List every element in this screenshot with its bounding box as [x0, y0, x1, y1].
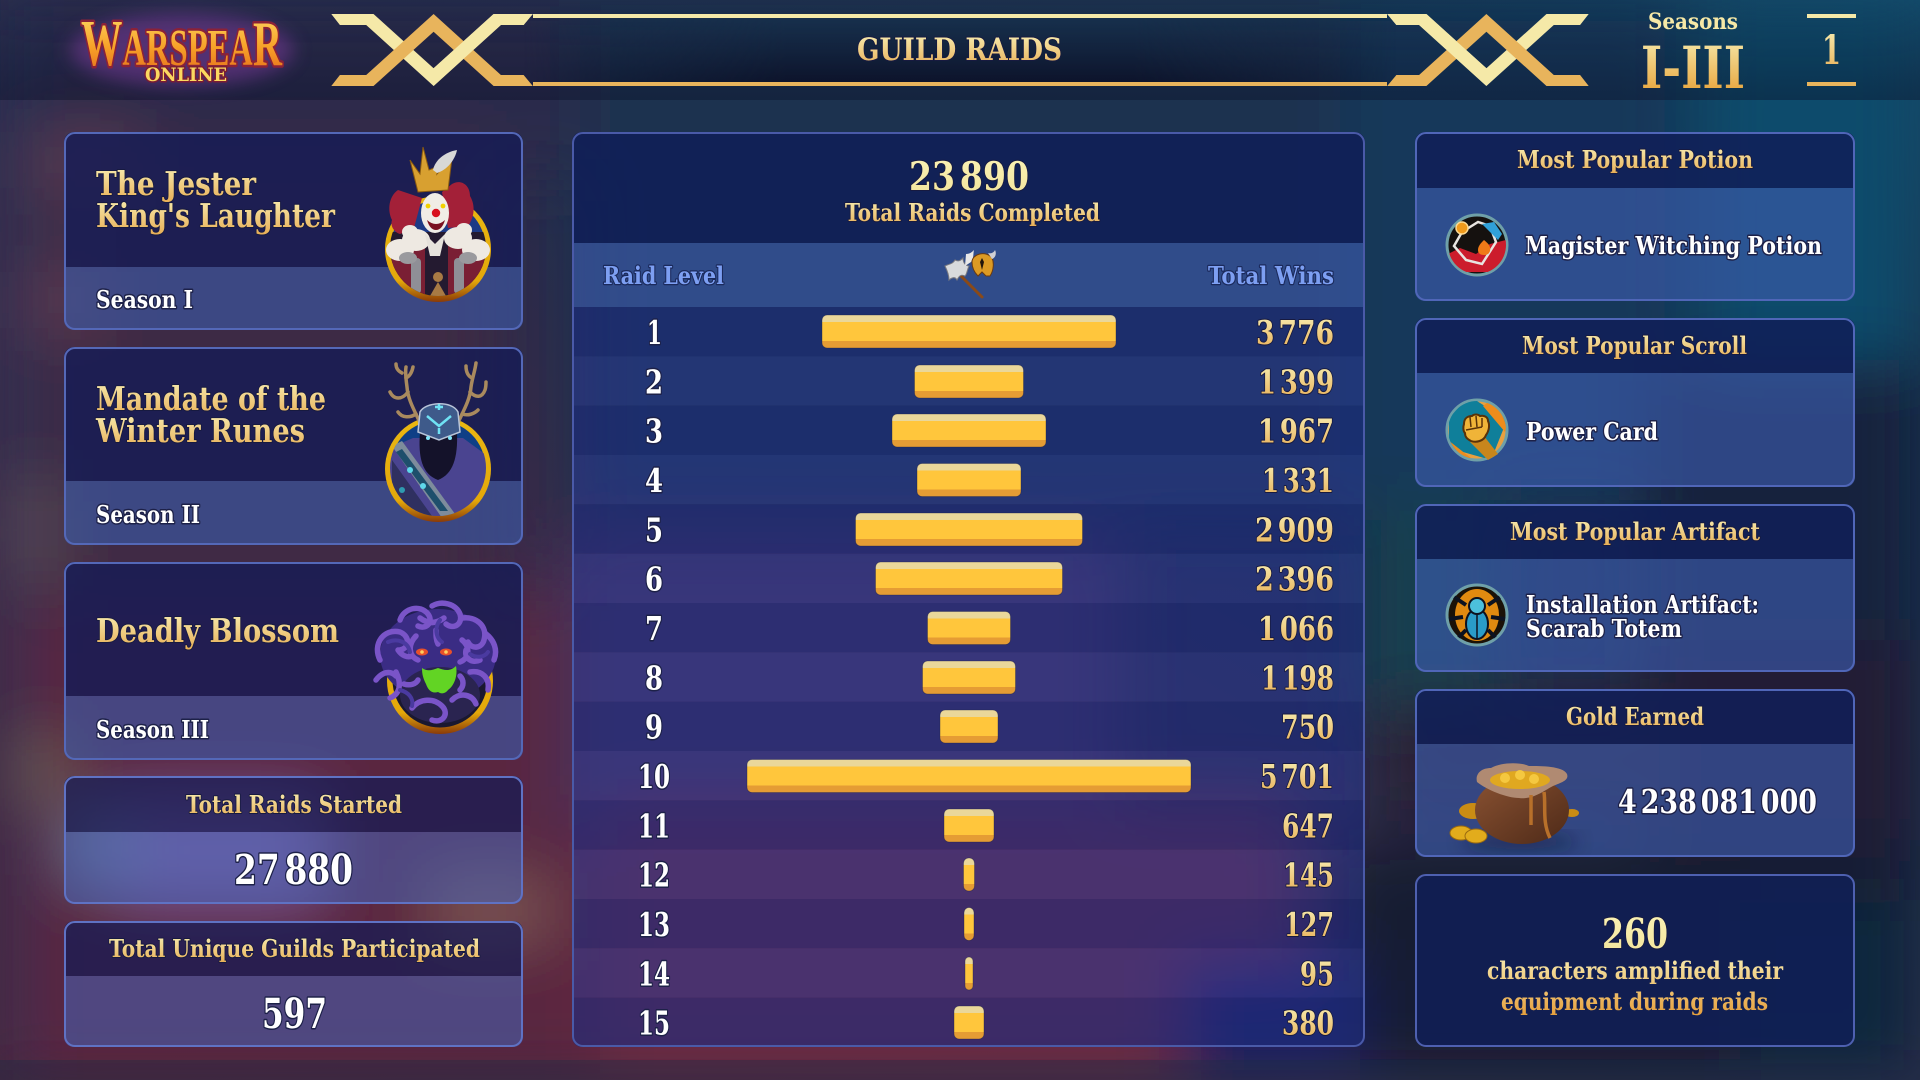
raid level numbers: 5 — [645, 510, 663, 549]
icon: deadly blossom — [376, 603, 496, 734]
panel: total raids started — [64, 776, 523, 904]
total wins values — [1255, 313, 1334, 1043]
title banner — [331, 14, 1589, 86]
value: 597 — [262, 990, 327, 1038]
icon: axe and helmet — [945, 250, 996, 297]
table rows — [572, 307, 1365, 1047]
caption — [1487, 956, 1783, 1016]
raid level numbers: 14 — [638, 954, 670, 993]
label: Most Popular Artifact — [1510, 517, 1760, 546]
heading: guild raids: GUILD RAIDS — [857, 32, 1062, 68]
panel: amplified characters — [1416, 875, 1854, 1046]
raid 1 name: King's Laughter — [96, 196, 335, 235]
label: Most Popular Potion — [1517, 145, 1753, 174]
total wins values: 1 331 — [1262, 461, 1334, 500]
panel: gold earned — [1415, 689, 1855, 857]
raid level numbers: 8 — [645, 658, 663, 697]
raid 2 name: Mandate of the — [96, 379, 326, 418]
total wins values: 1 198 — [1261, 658, 1334, 697]
total raids completed: Total Raids Completed — [845, 198, 1100, 227]
raid level numbers: 7 — [645, 609, 663, 648]
total wins values: 750 — [1281, 708, 1334, 747]
total wins values: 5 701 — [1260, 757, 1334, 796]
total wins values: 1 399 — [1258, 362, 1334, 401]
label: Most Popular Scroll — [1522, 331, 1747, 360]
value: 27 880 — [234, 846, 353, 894]
column head: raid level: Raid Level — [603, 261, 724, 290]
total wins values: 647 — [1282, 806, 1334, 845]
icon: bag of gold — [1450, 763, 1579, 850]
panel: most popular scroll — [1415, 318, 1855, 487]
caption: equipment during raids — [1501, 987, 1768, 1016]
raid level numbers: 13 — [638, 905, 670, 944]
raid 2 name — [95, 379, 326, 450]
icon: winter runes — [385, 363, 493, 522]
panel: raid 3 — [64, 562, 523, 760]
bars — [747, 315, 1191, 1039]
panel: raid 1 — [64, 132, 523, 330]
raid level numbers: 2 — [645, 362, 663, 401]
value: Installation Artifact: — [1526, 590, 1759, 619]
total raids completed: 23 890 — [909, 154, 1029, 200]
logo: Warspear Online: ONLINE — [145, 64, 227, 86]
raid 2 name: Winter Runes — [95, 411, 305, 450]
total wins values: 95 — [1300, 954, 1334, 993]
raid 1 name: The Jester — [96, 164, 257, 203]
raid level numbers: 11 — [638, 806, 670, 845]
label: Gold Earned — [1566, 702, 1704, 731]
value: Power Card — [1526, 417, 1658, 446]
caption: characters amplified their — [1487, 956, 1783, 985]
raid level numbers: 1 — [647, 313, 662, 352]
panel: raid 2 — [64, 347, 523, 545]
label: Total Raids Started — [186, 790, 402, 819]
page number: 1 — [1822, 27, 1841, 74]
total wins values: 145 — [1283, 856, 1334, 895]
column head: total wins: Total Wins — [1208, 261, 1334, 290]
value — [1526, 590, 1759, 643]
value: Magister Witching Potion — [1525, 231, 1822, 260]
value: 4 238 081 000 — [1618, 782, 1817, 821]
total wins values: 2 396 — [1255, 560, 1334, 599]
raid level numbers: 12 — [638, 856, 670, 895]
raid level numbers: 10 — [638, 757, 670, 796]
icon: power card — [1446, 398, 1508, 462]
total wins values: 3 776 — [1256, 313, 1334, 352]
raid level numbers: 3 — [645, 412, 663, 451]
total wins values: 1 066 — [1258, 609, 1334, 648]
header band — [0, 0, 1920, 100]
value: Scarab Totem — [1526, 614, 1682, 643]
panel: raid level chart — [572, 132, 1365, 1047]
raid 3 season: Season III — [96, 715, 209, 744]
total wins values: 1 967 — [1258, 412, 1334, 451]
raid level numbers: 6 — [645, 560, 663, 599]
page number — [1807, 14, 1856, 86]
raid level numbers: 15 — [638, 1004, 670, 1043]
seasons label: Seasons — [1648, 9, 1738, 35]
raid level numbers: 4 — [645, 461, 663, 500]
raid level numbers — [638, 313, 670, 1043]
panel: most popular potion — [1415, 132, 1855, 301]
total raids completed — [845, 154, 1100, 227]
raid 2 season: Season II — [96, 500, 200, 529]
value: 260 — [1602, 910, 1668, 958]
panel: most popular artifact — [1415, 504, 1855, 672]
total wins values: 2 909 — [1255, 510, 1334, 549]
raid level numbers: 9 — [645, 708, 663, 747]
logo: Warspear Online: WARSPEAR — [81, 7, 282, 80]
raid 1 season: Season I — [96, 285, 193, 314]
total wins values: 380 — [1282, 1004, 1334, 1043]
icon: jester king — [385, 147, 491, 302]
icon: potion — [1447, 215, 1507, 275]
seasons range: I-III — [1641, 34, 1745, 102]
total wins values: 127 — [1284, 905, 1334, 944]
panel: total unique guilds — [64, 921, 523, 1047]
label: Total Unique Guilds Participated — [109, 934, 480, 963]
icon: scarab totem — [1447, 585, 1507, 645]
raid 3 name: Deadly Blossom — [96, 611, 339, 650]
raid 1 name — [96, 164, 335, 235]
